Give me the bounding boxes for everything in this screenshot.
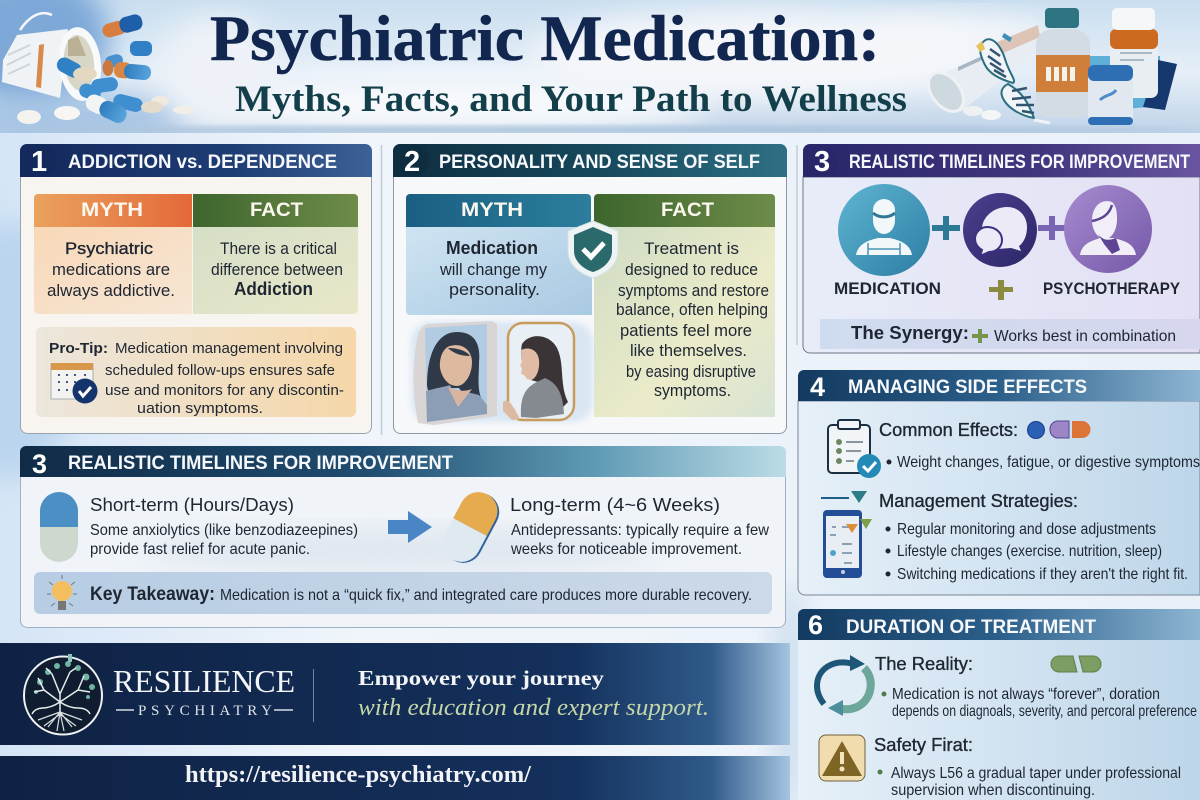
- fact column: FACT: [661, 200, 714, 221]
- panel header: timelines: 3: [32, 449, 47, 479]
- tagline: [358, 666, 709, 721]
- title: [210, 3, 907, 120]
- icon: psychotherapist: [1064, 185, 1152, 273]
- synergy band: Works best in combination: [994, 328, 1176, 345]
- long-term text: Long-term (4~6 Weeks): [510, 494, 720, 515]
- icon: warning triangle: [819, 735, 865, 781]
- fact column: symptoms.: [654, 381, 731, 400]
- panel: managing side effects: [798, 370, 1200, 595]
- panel: realistic timelines, synergy: [803, 144, 1200, 353]
- icon: light bulb: [47, 575, 77, 610]
- title: Psychiatric Medication:: [210, 3, 880, 75]
- myth column: [406, 194, 592, 315]
- icon: shield check: [568, 221, 618, 278]
- header banner: [0, 0, 1200, 145]
- icon: medication clinician: [838, 184, 930, 276]
- panel header: addiction: [20, 144, 372, 178]
- panel: personality and sense of self: [393, 144, 787, 434]
- panel header: personality: 2: [404, 146, 420, 178]
- panel header: duration: 6: [808, 610, 823, 640]
- pro-tip callout: scheduled follow-ups ensures safe: [105, 362, 335, 379]
- myth column: Psychiatric: [65, 239, 154, 258]
- labels: [834, 280, 1180, 300]
- fact column: FACT: [250, 200, 303, 221]
- myth column: always addictive.: [47, 281, 175, 300]
- icon: therapy speech bubbles: [963, 193, 1037, 267]
- safety text: supervision when discontinuing.: [891, 782, 1095, 799]
- safety text: Safety Firat:: [874, 735, 973, 755]
- fact column: difference between: [211, 260, 343, 279]
- panel header: duration: DURATION OF TREATMENT: [846, 617, 1096, 638]
- pro-tip callout: Medication management involving: [115, 340, 343, 357]
- fact column: balance, often helping: [616, 300, 768, 319]
- short-term text: provide fast relief for acute panic.: [90, 541, 310, 558]
- footer: brand banner: [0, 643, 790, 745]
- brand name: [113, 663, 295, 719]
- panel header: personality: PERSONALITY AND SENSE OF SELF: [439, 152, 760, 173]
- tagline: Empower your journey: [358, 666, 605, 690]
- panel header: side effects: 4: [810, 372, 825, 402]
- myth column: Medication: [446, 238, 538, 258]
- short-term text: Some anxiolytics (like benzodiazeepines): [90, 522, 358, 539]
- pro-tip callout: use and monitors for any discontin-: [105, 382, 344, 399]
- panel header: timelines: REALISTIC TIMELINES FOR IMPROVEMENT: [68, 453, 453, 474]
- icon: spilled pill bottle: [2, 13, 195, 125]
- footer: website url: https://resilience-psychiatry.com/: [185, 762, 531, 788]
- long-term text: weeks for noticeable improvement.: [510, 541, 742, 558]
- pro-tip callout: uation symptoms.: [137, 400, 263, 417]
- synergy band: The Synergy:: [851, 323, 969, 343]
- pro-tip callout: Pro-Tip:: [49, 340, 108, 357]
- panel header: side effects: [798, 370, 1200, 402]
- fact column: There is a critical: [220, 239, 337, 258]
- logo: tree in circle: [24, 654, 102, 734]
- brand name: RESILIENCE: [113, 663, 295, 699]
- synergy band: [820, 319, 1200, 349]
- illustration: woman and mirror: [411, 321, 593, 425]
- reality text: [875, 654, 1197, 720]
- myth column: will change my: [439, 260, 547, 279]
- management strategies text: Regular monitoring and dose adjustments: [897, 521, 1156, 538]
- panel header: addiction: 1: [31, 146, 47, 178]
- icon: calendar check: [51, 363, 98, 404]
- common effects text: [879, 420, 1200, 471]
- long-term text: [510, 494, 769, 558]
- icon: cycle arrows: [817, 655, 871, 716]
- myth column: [34, 194, 192, 314]
- footer: website url: [0, 756, 790, 800]
- short-term text: [90, 494, 358, 558]
- panel header: synergy: 3: [814, 146, 830, 178]
- fact column: Addiction: [234, 279, 313, 299]
- myth column: personality.: [449, 280, 540, 299]
- fact column: symptoms and restore: [618, 281, 769, 300]
- panel: addiction vs dependence: [20, 144, 372, 434]
- short-term text: Short-term (Hours/Days): [90, 494, 294, 515]
- panel header: timelines: [20, 446, 786, 479]
- management strategies text: Management Strategies:: [879, 491, 1078, 511]
- arrow: short to long term: [388, 511, 432, 543]
- management strategies text: Lifestyle changes (exercise. nutrition, sleep): [897, 543, 1162, 560]
- icon: clipboard check: [828, 420, 881, 478]
- icon: orange capsule: [436, 485, 506, 570]
- fact column: by easing disruptive: [626, 362, 756, 381]
- labels: MEDICATION: [834, 280, 941, 298]
- key takeaway band: [34, 572, 772, 614]
- common effects text: Common Effects:: [879, 420, 1018, 440]
- panel: realistic timelines for improvement: [20, 446, 786, 628]
- panel header: duration: [798, 609, 1200, 640]
- fact column: patients feel more: [620, 321, 752, 340]
- brand name: PSYCHIATRY: [138, 703, 272, 719]
- key takeaway band: Medication is not a “quick fix,” and integrated care produces more durable recovery.: [220, 587, 752, 604]
- reality text: Medication is not always “forever”, doration: [892, 686, 1160, 703]
- reality text: The Reality:: [875, 654, 973, 674]
- icon: phone with checklist: [821, 491, 872, 578]
- panel header: personality: [393, 144, 787, 178]
- safety text: [874, 735, 1181, 799]
- pro-tip callout: [36, 327, 356, 417]
- panel header: synergy: [803, 144, 1200, 178]
- myth column: MYTH: [81, 200, 143, 221]
- panel header: addiction: ADDICTION vs. DEPENDENCE: [68, 152, 337, 173]
- labels: PSYCHOTHERAPY: [1043, 280, 1180, 298]
- fact column: [193, 194, 358, 314]
- icon: plus teal: [932, 216, 960, 240]
- title: Myths, Facts, and Your Path to Wellness: [235, 79, 907, 120]
- long-term text: Antidepressants: typically require a few: [511, 522, 769, 539]
- tagline: with education and expert support.: [358, 695, 709, 721]
- fact column: like themselves.: [630, 341, 747, 360]
- fact column: designed to reduce: [625, 260, 758, 279]
- panel header: side effects: MANAGING SIDE EFFECTS: [848, 377, 1087, 398]
- panel: duration of treatment: [798, 609, 1200, 800]
- key takeaway band: Key Takeaway:: [90, 584, 215, 605]
- fact column: Treatment is: [644, 239, 739, 258]
- myth column: medications are: [52, 260, 170, 279]
- icon: bottles, DNA and journal: [921, 8, 1177, 125]
- management strategies text: [879, 491, 1188, 583]
- fact column: [594, 194, 775, 417]
- icon: blue capsule: [40, 492, 78, 562]
- myth column: MYTH: [461, 200, 523, 221]
- icon: plus purple: [1038, 216, 1066, 240]
